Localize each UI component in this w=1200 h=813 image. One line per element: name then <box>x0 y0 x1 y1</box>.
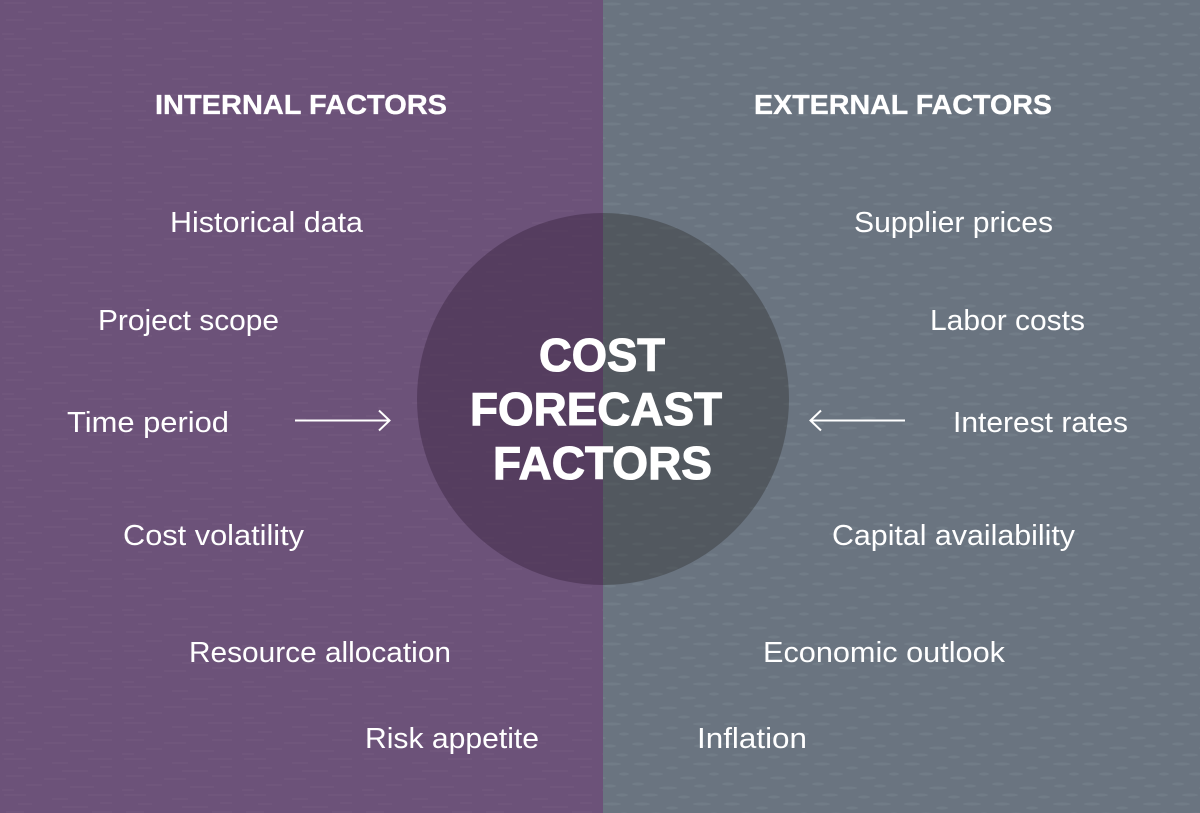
internal factor list: Cost volatility <box>123 520 305 552</box>
internal factor list: Risk appetite <box>365 723 539 755</box>
title: cost forecast factors: FORECAST <box>470 383 722 435</box>
central circle <box>417 213 789 585</box>
external factor list: Economic outlook <box>763 637 1006 669</box>
heading: external factors: EXTERNAL FACTORS <box>754 89 1052 120</box>
external factor list: Capital availability <box>832 520 1076 552</box>
panel: internal factors background <box>0 0 603 813</box>
title: cost forecast factors: COST <box>539 329 665 381</box>
arrow: external factors to centre <box>810 410 905 430</box>
external factor list <box>697 207 1128 755</box>
title: cost forecast factors <box>470 329 722 489</box>
external factor list: Interest rates <box>953 407 1128 439</box>
arrow: internal factors to centre <box>295 410 390 430</box>
internal factor list: Historical data <box>170 207 364 239</box>
external factor list: Inflation <box>697 723 807 755</box>
external factor list: Supplier prices <box>854 207 1053 239</box>
heading: internal factors: INTERNAL FACTORS <box>155 89 447 120</box>
panel: external factors background <box>603 0 1200 813</box>
internal factor list <box>67 207 539 755</box>
external factor list: Labor costs <box>930 305 1085 337</box>
internal factor list: Project scope <box>98 305 279 337</box>
internal factor list: Resource allocation <box>189 637 451 669</box>
title: cost forecast factors: FACTORS <box>493 437 712 489</box>
internal factor list: Time period <box>67 407 229 439</box>
